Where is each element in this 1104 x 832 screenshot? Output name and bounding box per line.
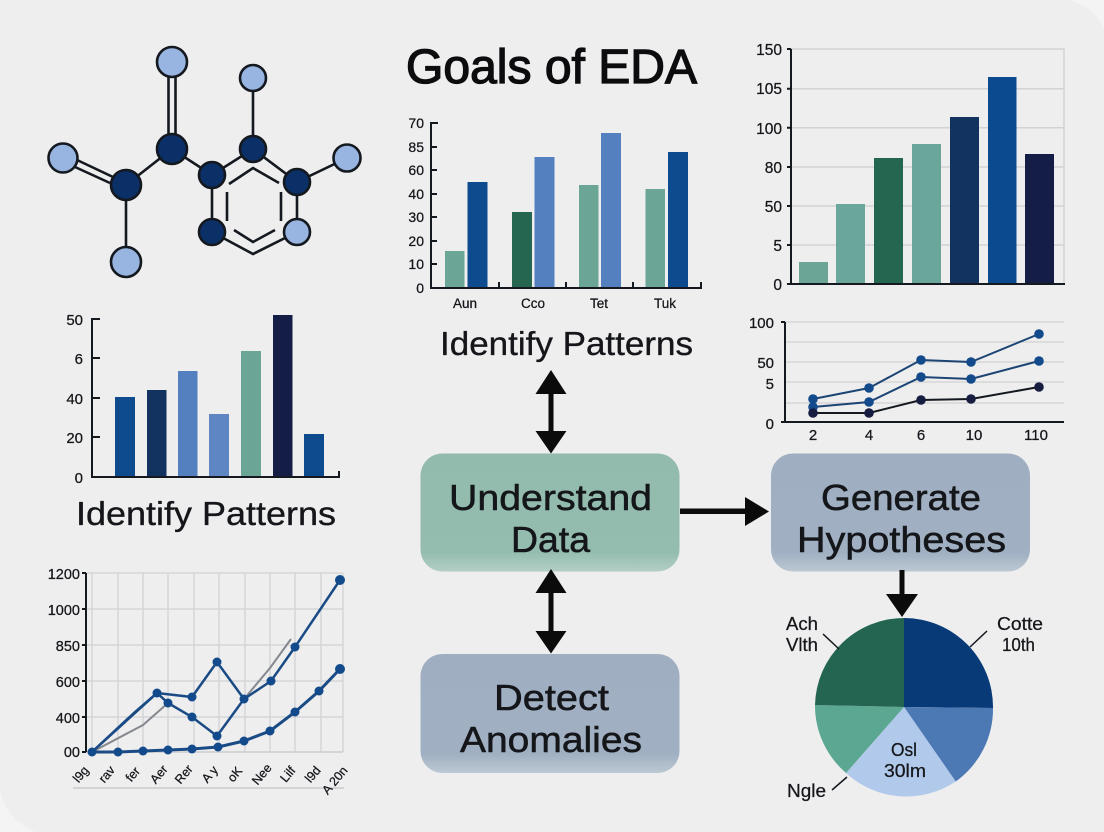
pie chart: Osl (891, 740, 917, 760)
line chart: small right (749, 315, 1064, 444)
bar chart: top center: 70 (408, 115, 424, 131)
bar chart: top right: 5 (773, 238, 782, 255)
bar chart: top center: 30 (408, 209, 424, 225)
bar chart: left: 0 (75, 470, 83, 487)
bar chart: top center: Cco (521, 296, 545, 311)
bar chart: top right: 0 (773, 277, 782, 294)
bar chart: left: 40 (66, 391, 83, 408)
line chart: bottom left: 1200 (48, 567, 80, 583)
bar chart: top right: 50 (765, 199, 782, 216)
line chart: bottom left (48, 567, 351, 797)
line chart: small right: 2 (809, 427, 817, 444)
bar chart: left (66, 312, 339, 487)
line chart: small right: 4 (865, 427, 873, 444)
bar chart: top center: 40 (408, 186, 424, 202)
arrow: generate hypotheses to pie chart (886, 570, 918, 617)
bar chart: top center: 85 (408, 139, 424, 155)
box: understand data: Understand (449, 477, 652, 518)
line chart: small right: 10 (966, 427, 982, 444)
bar chart: top center: 60 (408, 162, 424, 178)
bar chart: left: 20 (66, 430, 83, 447)
bar chart: top center (408, 115, 701, 311)
pie chart: Ngle (787, 781, 826, 801)
box: detect anomalies (420, 654, 680, 773)
box: generate hypotheses (771, 454, 1030, 572)
bar chart: top right: 80 (765, 160, 782, 177)
pie chart: 10th (1002, 635, 1035, 655)
bar chart: top right: 100 (756, 121, 782, 138)
heading: identify patterns center: Identify Patterns (440, 326, 693, 363)
pie chart: 30lm (884, 761, 926, 781)
arrow: understand data to generate hypotheses (680, 497, 769, 526)
line chart: bottom left: A 20n (319, 764, 351, 797)
bar chart: top center: 10 (408, 256, 424, 272)
title: Goals of EDA (406, 41, 697, 94)
line chart: bottom left: oK (225, 764, 246, 785)
box: understand data: Data (511, 519, 591, 560)
line chart: small right: 6 (917, 427, 925, 444)
box: generate hypotheses: Generate (821, 477, 981, 518)
line chart: bottom left: Lilf (277, 763, 299, 785)
line chart: bottom left: 00 (64, 745, 80, 761)
line chart: bottom left: fer (123, 764, 143, 785)
pie chart: Cotte (997, 614, 1043, 634)
heading: identify patterns left: Identify Patterns (76, 496, 336, 533)
bar chart: left: 6 (75, 351, 83, 368)
arrow: understand data to detect anomalies (536, 569, 566, 654)
bar chart: top center: Tuk (654, 296, 676, 311)
box: understand data (420, 454, 680, 572)
pie chart: Vlth (786, 635, 818, 655)
line chart: bottom left: Rer (172, 762, 196, 787)
bar chart: top center: 0 (416, 280, 424, 296)
bar chart: top right: 105 (756, 81, 782, 98)
box: detect anomalies: Anomalies (460, 719, 642, 760)
line chart: bottom left: rav (96, 763, 118, 786)
line chart: small right: 100 (749, 315, 774, 332)
icon: molecule diagram (48, 47, 360, 277)
line chart: bottom left: Aer (147, 762, 171, 786)
bar chart: top center: Aun (453, 296, 477, 311)
line chart: bottom left: 600 (56, 675, 80, 691)
line chart: bottom left: l9d (302, 764, 324, 785)
line chart: small right: 50 (757, 355, 774, 372)
line chart: bottom left: A y (199, 763, 221, 786)
bar chart: top center: 20 (408, 233, 424, 249)
arrow: identify patterns to understand data (536, 370, 566, 454)
bar chart: left: 50 (66, 312, 83, 329)
line chart: bottom left: Nee (249, 761, 275, 788)
pie chart (786, 614, 1043, 801)
bar chart: top right: 150 (756, 42, 782, 59)
box: detect anomalies: Detect (494, 677, 609, 718)
line chart: small right: 0 (766, 416, 774, 433)
line chart: bottom left: 1000 (48, 603, 80, 619)
line chart: bottom left: l9g (70, 764, 92, 785)
bar chart: top right (756, 42, 1065, 294)
pie chart: Ach (786, 614, 818, 634)
line chart: bottom left: 850 (56, 639, 80, 655)
bar chart: top center: Tet (590, 296, 608, 311)
line chart: small right: 5 (766, 376, 774, 393)
line chart: bottom left: 400 (56, 711, 80, 727)
line chart: small right: 110 (1024, 427, 1048, 444)
box: generate hypotheses: Hypotheses (797, 519, 1006, 560)
